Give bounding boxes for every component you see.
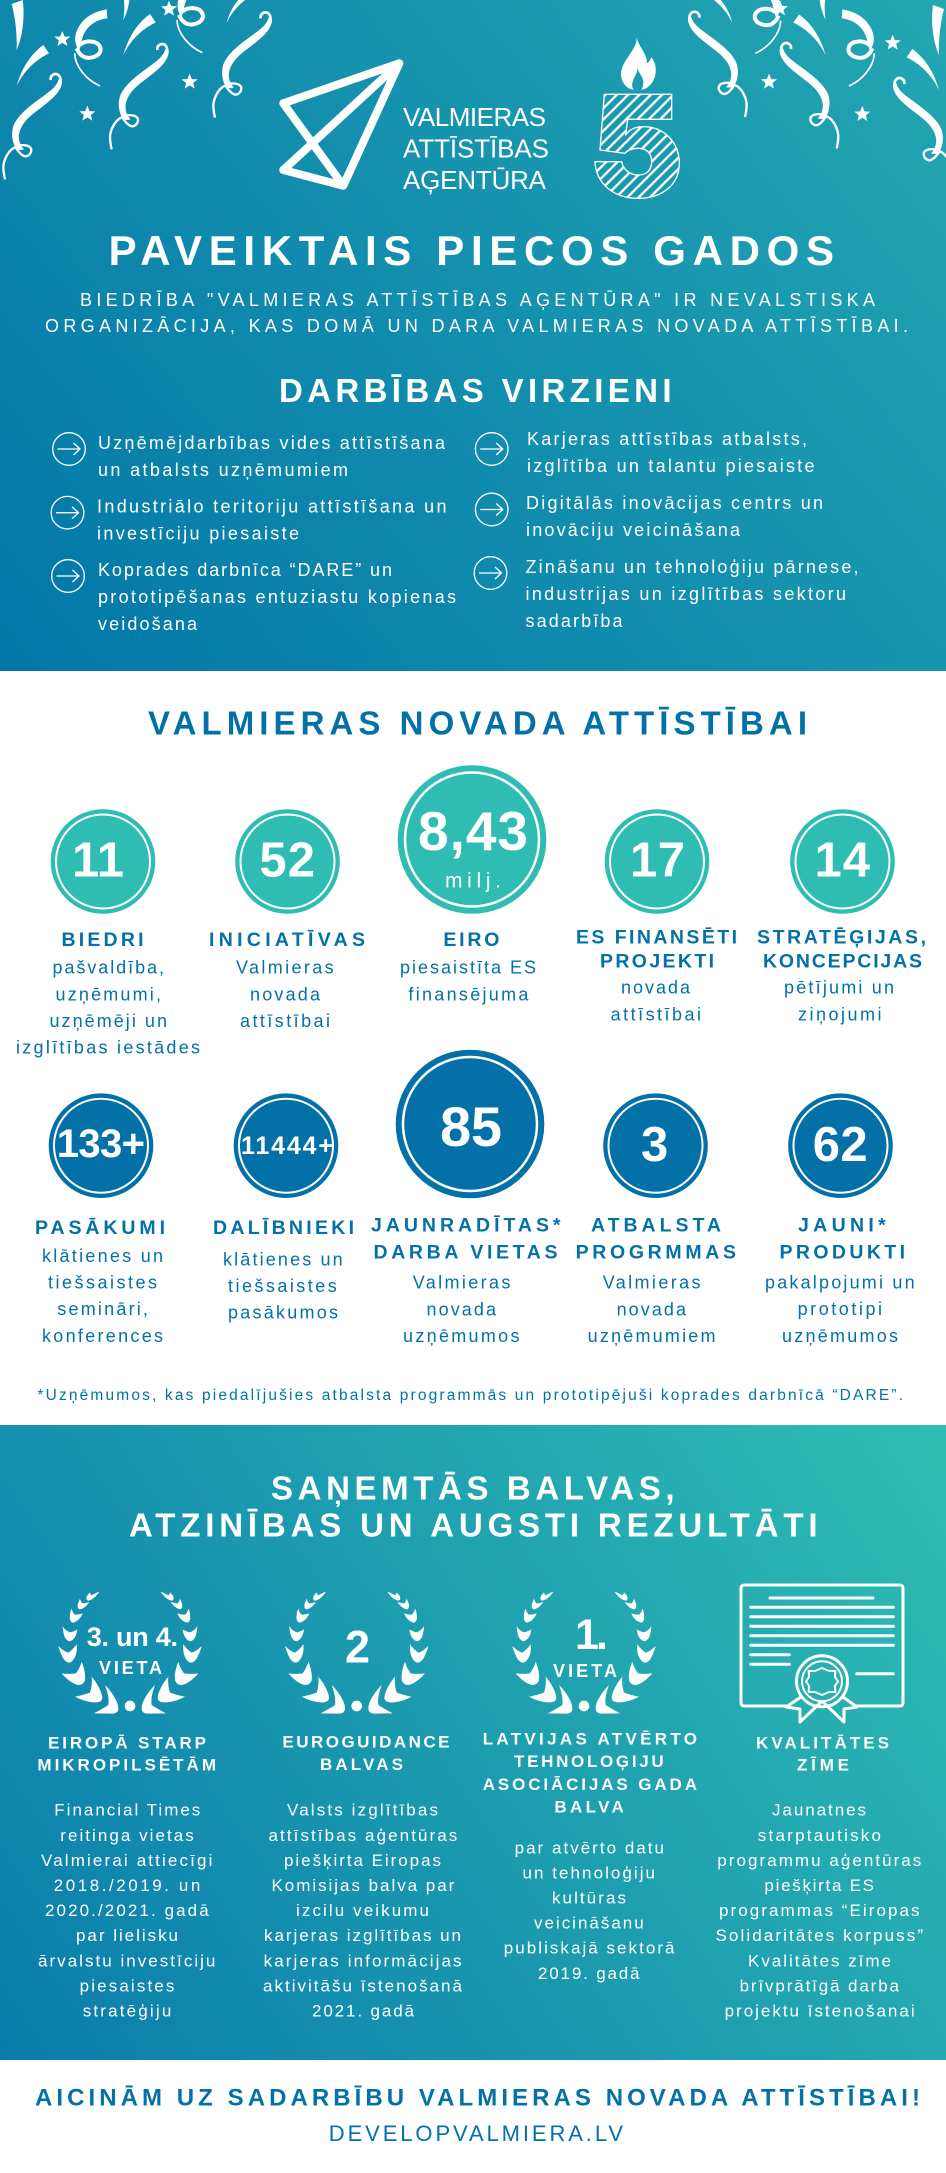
stat: 62 produkti: uzņēmumos	[782, 1326, 898, 1346]
award: Kvalitātes zīme: ZĪME	[797, 1756, 849, 1775]
stat: 3 atbalsta programmas: Valmieras	[603, 1273, 700, 1293]
award: Latvijas atvērto tehnoloģiju asociācijas gada balva: TEHNOLOĢIJU	[514, 1752, 664, 1771]
stat: 133+ pasākumi: tiešsaistes	[48, 1273, 157, 1293]
award: Euroguidance balvas: izcilu veikumu	[296, 1901, 429, 1920]
logo: paper plane	[283, 63, 399, 186]
stat: 85 darba vietas: novada	[426, 1299, 497, 1319]
stat: 133+ pasākumi: klātienes un	[42, 1246, 163, 1266]
stat: 11 biedri: uzņēmumi,	[56, 984, 161, 1004]
list: activity directions right: Karjeras attīstības atbalsts,	[527, 429, 807, 449]
list: activity directions left: investīciju piesaiste	[97, 524, 299, 544]
list: activity directions left: Koprades darbnīca “DARE” un	[98, 560, 392, 580]
award: Latvijas atvērto tehnoloģiju asociācijas gada balva: LATVIJAS ATVĒRTO	[483, 1729, 697, 1748]
stat: 62 produkti: pakalpojumi un	[765, 1273, 915, 1293]
stat: 17 projekti: attīstībai	[611, 1004, 701, 1024]
stat: 133+ pasākumi: PASĀKUMI	[35, 1217, 165, 1239]
stat: 3 atbalsta programmas: PROGRMMAS	[576, 1241, 736, 1263]
award: Eiropā starp mikropilsētām: 3. un 4.	[87, 1622, 178, 1652]
list: activity directions right: Zināšanu un tehnoloģiju pārnese,	[526, 557, 858, 577]
list: activity directions left: veidošana	[98, 614, 198, 634]
stat: 3 atbalsta programmas: uzņēmumiem	[588, 1326, 716, 1346]
list: activity directions right: Digitālās inovācijas centrs un	[526, 493, 823, 513]
logo: wordmark: VALMIERAS	[403, 102, 546, 132]
award: Kvalitātes zīme: piešķirta ES	[764, 1876, 874, 1895]
award: Eiropā starp mikropilsētām: piesaistes	[80, 1976, 174, 1995]
call to action: AICINĀM UZ SADARBĪBU VALMIERAS NOVADA ATTĪSTĪBAI!	[35, 2084, 920, 2111]
logo: wordmark: AĢENTŪRA	[403, 165, 547, 195]
stat: 8,43 milj. eiro: milj.	[445, 870, 501, 893]
panel: awards background	[0, 1425, 946, 2060]
stat: 62 produkti	[765, 1093, 915, 1346]
stat: 8,43 milj. eiro: piesaistīta ES	[400, 958, 536, 978]
award: Kvalitātes zīme: starptautisko	[758, 1826, 881, 1845]
stat: 133+ pasākumi: semināri,	[57, 1299, 148, 1319]
stat: 52 iniciatīvas	[209, 809, 365, 1031]
stat: 11444+ dalībnieki: DALĪBNIEKI	[213, 1217, 354, 1239]
stat: 11 biedri: pašvaldība,	[52, 958, 164, 978]
award: Kvalitātes zīme: Kvalitātes zīme	[748, 1951, 891, 1970]
stat: 85 darba vietas: Valmieras	[413, 1273, 510, 1293]
list: activity directions right: inovāciju veicināšana	[526, 520, 741, 540]
stat: 11444+ dalībnieki: klātienes un	[223, 1249, 343, 1269]
award: Euroguidance balvas: EUROGUIDANCE	[282, 1733, 450, 1752]
stat: 3 atbalsta programmas: 3	[641, 1118, 668, 1172]
award: Eiropā starp mikropilsētām: 2020./2021. gadā	[45, 1901, 209, 1920]
stat: 133+ pasākumi	[35, 1093, 165, 1346]
award: Euroguidance balvas	[263, 1592, 463, 2020]
stat: 62 produkti: 62	[813, 1118, 868, 1172]
stat: 11444+ dalībnieki: tiešsaistes	[228, 1276, 337, 1296]
stat: 52 iniciatīvas: novada	[250, 984, 321, 1004]
stat: 62 produkti: PRODUKTI	[780, 1241, 905, 1263]
stat: 14 stratēģijas: STRATĒĢIJAS,	[757, 926, 926, 948]
stat: 85 darba vietas: JAUNRADĪTAS*	[371, 1215, 561, 1237]
award: Eiropā starp mikropilsētām: Valmierai attiecīgi	[41, 1851, 212, 1870]
stat: 52 iniciatīvas: Valmieras	[236, 958, 334, 978]
confetti: right	[689, 0, 946, 183]
award: Euroguidance balvas: piešķirta Eiropas	[284, 1851, 441, 1870]
stat: 17 projekti	[576, 809, 737, 1024]
stat: 3 atbalsta programmas: ATBALSTA	[591, 1215, 721, 1237]
award: Eiropā starp mikropilsētām: reitinga vietas	[60, 1826, 194, 1845]
award: Latvijas atvērto tehnoloģiju asociācijas gada balva: BALVA	[554, 1798, 624, 1817]
logo: wordmark	[403, 102, 549, 195]
stat: 11444+ dalībnieki	[213, 1093, 354, 1323]
stat: 85 darba vietas: 85	[440, 1095, 502, 1158]
stat: 3 atbalsta programmas	[576, 1093, 736, 1346]
stat: 3 atbalsta programmas: novada	[617, 1299, 687, 1319]
award: Euroguidance balvas: Valsts izglītības	[287, 1801, 438, 1820]
list: activity directions left: Industriālo teritoriju attīstīšana un	[97, 497, 446, 517]
stat: 8,43 milj. eiro: finansējuma	[408, 984, 529, 1004]
intro text: BIEDRĪBA "VALMIERAS ATTĪSTĪBAS AĢENTŪRA" IR NEVALSTISKA	[80, 290, 875, 310]
stat: 14 stratēģijas: 14	[814, 834, 870, 888]
icon: number five candle	[595, 37, 679, 198]
stat: 14 stratēģijas	[757, 809, 926, 1024]
heading: awards: ATZINĪBAS UN AUGSTI REZULTĀTI	[129, 1507, 818, 1544]
panel: header background	[0, 0, 946, 671]
intro text	[45, 290, 908, 336]
award: Eiropā starp mikropilsētām: VIETA	[99, 1658, 162, 1678]
stat: 14 stratēģijas: KONCEPCIJAS	[763, 951, 922, 973]
award: Latvijas atvērto tehnoloģiju asociācijas gada balva: 2019. gadā	[538, 1964, 640, 1983]
award: Eiropā starp mikropilsētām: ārvalstu investīciju	[38, 1951, 215, 1970]
award: Eiropā starp mikropilsētām: stratēģiju	[83, 2002, 171, 2020]
stat: 11 biedri	[16, 809, 200, 1058]
stat: 11444+ dalībnieki: pasākumos	[228, 1303, 338, 1323]
list: activity directions left: prototipēšanas entuziastu kopienas	[98, 587, 456, 607]
award: Latvijas atvērto tehnoloģiju asociācijas gada balva: ASOCIĀCIJAS GADA	[483, 1775, 697, 1794]
award: Euroguidance balvas: aktivitāšu īstenošanā	[263, 1976, 463, 1995]
award: Latvijas atvērto tehnoloģiju asociācijas gada balva: veicināšanu	[534, 1914, 644, 1933]
award: Euroguidance balvas: 2021. gadā	[312, 2002, 415, 2020]
award: Euroguidance balvas: karjeras izglītības un	[264, 1926, 461, 1945]
stat: 11 biedri: izglītības iestādes	[16, 1038, 200, 1058]
award: Kvalitātes zīme	[716, 1585, 923, 2020]
list: activity directions right: industrijas un izglītības sektoru	[526, 584, 846, 604]
award: Latvijas atvērto tehnoloģiju asociācijas gada balva: un tehnoloģiju	[522, 1863, 655, 1882]
list: activity directions right	[474, 429, 858, 631]
intro text: ORGANIZĀCIJA, KAS DOMĀ UN DARA VALMIERAS NOVADA ATTĪSTĪBAI.	[45, 316, 908, 336]
award: Eiropā starp mikropilsētām: EIROPĀ STARP	[48, 1733, 206, 1752]
award: Kvalitātes zīme: projektu īstenošanai	[725, 2002, 915, 2020]
award: Eiropā starp mikropilsētām	[37, 1592, 216, 2020]
confetti: left	[3, 0, 271, 179]
stat: 11 biedri: 11	[72, 834, 124, 888]
stat: 17 projekti: ES FINANSĒTI	[576, 926, 737, 948]
list: activity directions left: Uzņēmējdarbības vides attīstīšana	[98, 433, 446, 453]
stat: 8,43 milj. eiro	[398, 765, 546, 1004]
stat: 11444+ dalībnieki: 11444+	[241, 1132, 333, 1160]
award: Eiropā starp mikropilsētām: Financial Times	[54, 1801, 200, 1820]
stat: 14 stratēģijas: ziņojumi	[798, 1004, 882, 1024]
award: Latvijas atvērto tehnoloģiju asociācijas gada balva: par atvērto datu	[515, 1838, 664, 1857]
stat: 17 projekti: novada	[621, 978, 691, 998]
stat: 85 darba vietas: DARBA VIETAS	[374, 1241, 558, 1263]
stat: 62 produkti: prototipi	[798, 1299, 882, 1319]
award: Latvijas atvērto tehnoloģiju asociācijas gada balva: kultūras	[552, 1888, 626, 1908]
list: activity directions right: sadarbība	[526, 611, 623, 631]
heading: activity directions: DARBĪBAS VIRZIENI	[279, 372, 672, 409]
list: activity directions right: izglītība un talantu piesaiste	[527, 456, 814, 476]
award: Kvalitātes zīme: Solidaritātes korpuss”	[716, 1926, 923, 1945]
stat: 52 iniciatīvas: INICIATĪVAS	[209, 929, 365, 951]
stat: 62 produkti: JAUNI*	[798, 1215, 886, 1237]
list: activity directions left: un atbalsts uzņēmumiem	[98, 460, 348, 480]
logo: wordmark: ATTĪSTĪBAS	[403, 133, 549, 163]
award: Euroguidance balvas: Komisijas balva par	[272, 1876, 455, 1895]
award: Kvalitātes zīme: brīvprātīgā darba	[740, 1976, 900, 1995]
heading: awards: SAŅEMTĀS BALVAS,	[271, 1469, 674, 1506]
title: PAVEIKTAIS PIECOS GADOS	[109, 227, 834, 274]
award: Euroguidance balvas: BALVAS	[320, 1755, 403, 1774]
award: Kvalitātes zīme: KVALITĀTES	[756, 1733, 889, 1752]
stat: 85 darba vietas: uzņēmumos	[403, 1326, 520, 1346]
stat: 11 biedri: uzņēmēji un	[50, 1011, 167, 1031]
stat: 11 biedri: BIEDRI	[62, 929, 144, 951]
footnote: *Uzņēmumos, kas piedalījušies atbalsta programmās un prototipējuši koprades darbnīcā “DARE”.	[37, 1387, 903, 1404]
website: DEVELOPVALMIERA.LV	[329, 2121, 623, 2146]
icon: certificate	[741, 1585, 903, 1722]
stat: 8,43 milj. eiro: EIRO	[443, 929, 499, 951]
award: Eiropā starp mikropilsētām: par lielisku	[76, 1926, 178, 1945]
award: Latvijas atvērto tehnoloģiju asociācijas gada balva	[483, 1592, 697, 1983]
award: Latvijas atvērto tehnoloģiju asociācijas gada balva: 1.	[575, 1611, 608, 1659]
stat: 85 darba vietas	[371, 1050, 561, 1346]
list: activity directions left	[51, 433, 456, 634]
award: Kvalitātes zīme: Jaunatnes	[772, 1801, 866, 1820]
stat: 8,43 milj. eiro: 8,43	[418, 800, 528, 862]
stat: 52 iniciatīvas: 52	[259, 834, 315, 888]
award: Latvijas atvērto tehnoloģiju asociācijas gada balva: publiskajā sektorā	[504, 1939, 675, 1958]
award: Kvalitātes zīme: programmu aģentūras	[717, 1851, 921, 1870]
award: Kvalitātes zīme: programmas “Eiropas	[719, 1901, 920, 1920]
award: Eiropā starp mikropilsētām: 2018./2019. un	[54, 1876, 200, 1895]
award: Euroguidance balvas: karjeras informācijas	[264, 1951, 462, 1970]
award: Eiropā starp mikropilsētām: MIKROPILSĒTĀM	[37, 1756, 216, 1775]
award: Euroguidance balvas: 2	[345, 1622, 370, 1673]
heading: development of the region: VALMIERAS NOVADA ATTĪSTĪBAI	[148, 704, 807, 742]
stat: 14 stratēģijas: pētījumi un	[784, 978, 894, 998]
heading: awards	[129, 1469, 818, 1544]
stat: 17 projekti: PROJEKTI	[600, 951, 714, 973]
award: Euroguidance balvas: attīstības aģentūras	[268, 1826, 457, 1845]
stat: 133+ pasākumi: 133+	[57, 1122, 145, 1166]
stat: 52 iniciatīvas: attīstībai	[240, 1011, 330, 1031]
stat: 133+ pasākumi: konferences	[42, 1326, 163, 1346]
award: Latvijas atvērto tehnoloģiju asociācijas gada balva: VIETA	[553, 1661, 617, 1681]
stat: 17 projekti: 17	[630, 834, 685, 888]
